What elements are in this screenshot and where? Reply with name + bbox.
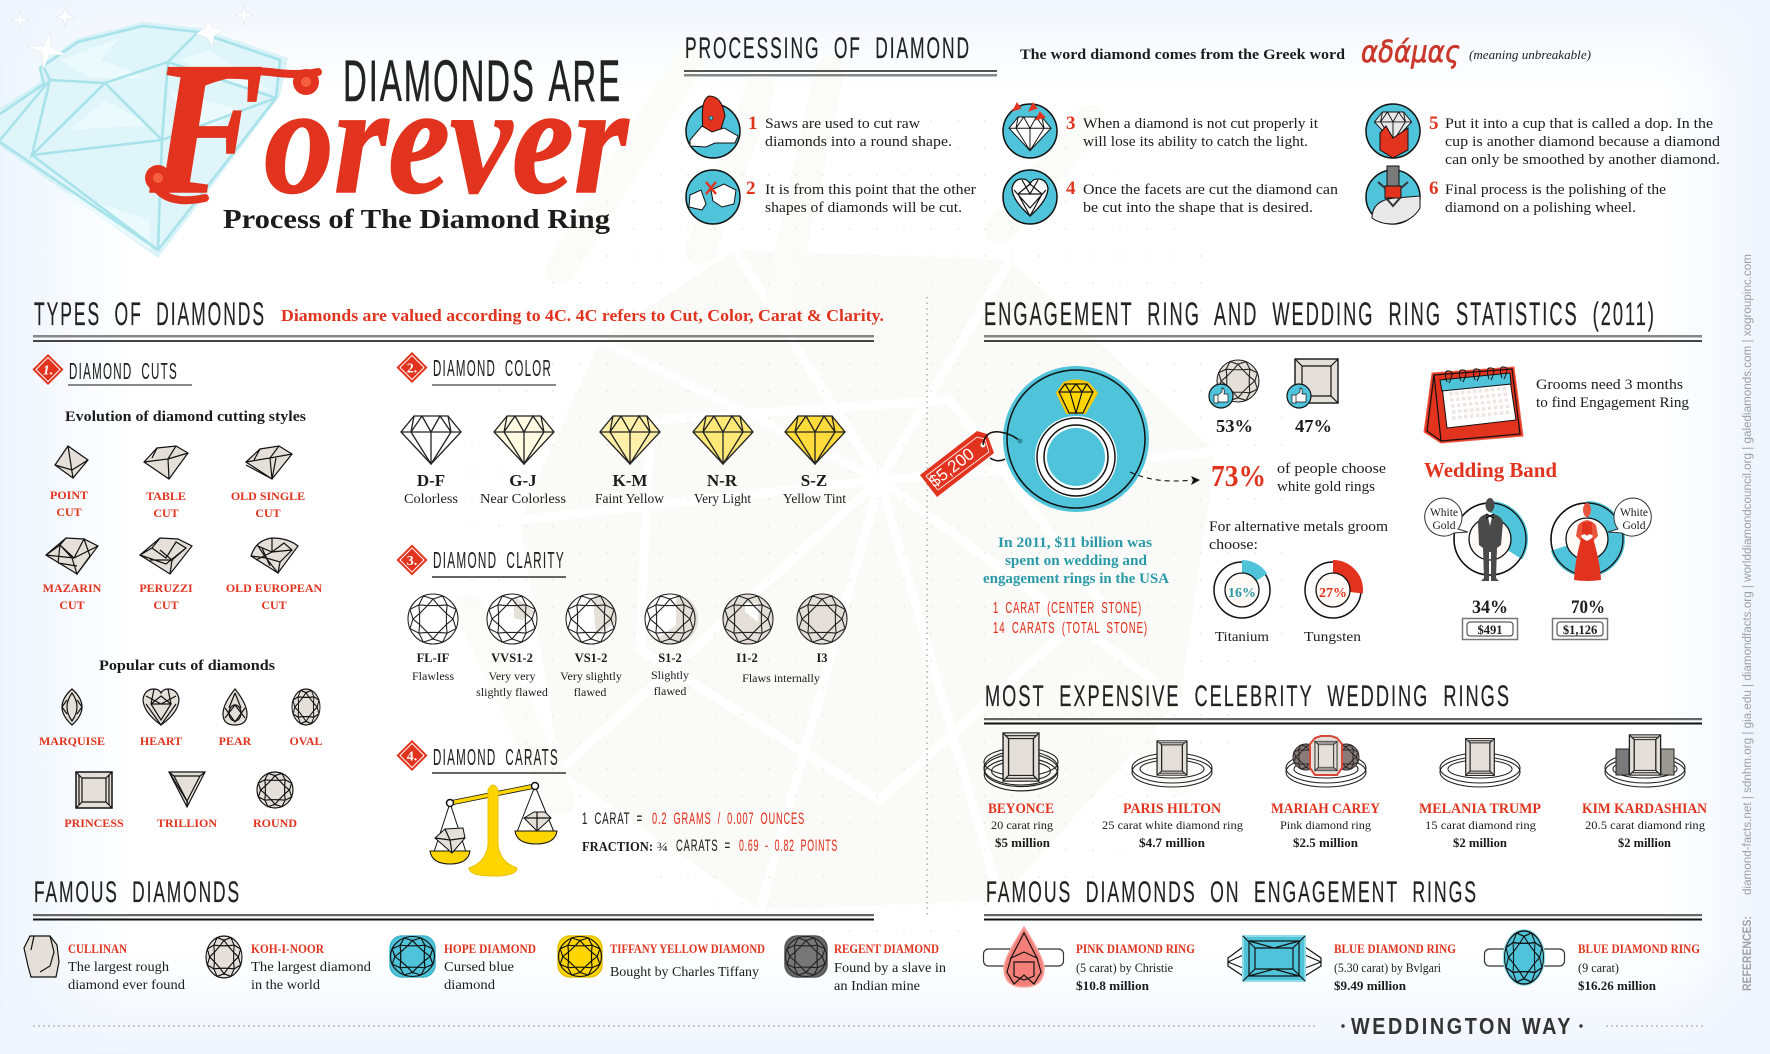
blue diamond ring Bvlgari — [1228, 936, 1456, 993]
carat conversion — [582, 809, 805, 828]
stat: 73 percent white gold: of people choose — [1277, 461, 1386, 477]
icon: princess — [76, 772, 112, 808]
alternative metals text: choose: — [1209, 537, 1258, 553]
panel: diamond cuts — [32, 354, 323, 830]
Regent Diamond: Found by a slave in — [834, 961, 946, 976]
step 4: 4 — [1066, 178, 1076, 199]
label: old single cut: OLD SINGLE — [231, 489, 305, 503]
clarity S1-2: S1-2 — [658, 651, 682, 665]
icon: round — [257, 772, 293, 808]
footer logo — [33, 1013, 1703, 1039]
stat: groom price: $491 — [1478, 623, 1502, 637]
clarity S1-2: Slightly — [651, 668, 689, 682]
references: diamond-facts.net | sdnhm.org | gia.edu | diamondfacts.org | worlddiamondcouncil.org | galediamonds.com | xogroupinc.com — [1742, 254, 1754, 895]
blue diamond ring oval: (9 carat) — [1578, 961, 1619, 975]
label: heart: HEART — [140, 734, 182, 748]
icon: ring — [1003, 366, 1149, 512]
hero diamond with stars — [0, 22, 288, 258]
donut: titanium: Titanium — [1215, 630, 1269, 645]
step 6: Final process is the polishing of the — [1445, 182, 1666, 198]
label: table cut: CUT — [153, 506, 179, 520]
badge 3: 3. — [407, 554, 417, 569]
blue diamond ring Bvlgari: BLUE DIAMOND RING — [1334, 942, 1456, 956]
dashed arrow — [1130, 472, 1200, 485]
ring: Beyonce: $5 million — [995, 836, 1050, 850]
speech bubble right: Gold — [1622, 520, 1646, 532]
color G-J — [480, 416, 566, 507]
label: old european cut: CUT — [261, 598, 287, 612]
icon: old european cut — [251, 538, 298, 573]
clarity I1-2 — [723, 594, 773, 665]
donut: titanium — [1214, 562, 1270, 645]
greek word note: αδάμας — [1361, 35, 1460, 70]
alternative metals text: For alternative metals groom — [1209, 519, 1388, 535]
stat: groom price — [1462, 597, 1518, 640]
ring: Melania Trump: $2 million — [1453, 836, 1507, 850]
color K-M: Faint Yellow — [595, 492, 665, 507]
label: mazarin cut: MAZARIN — [43, 581, 102, 595]
carat fraction: ¾ — [657, 839, 668, 854]
badge 2: 2. — [407, 362, 417, 376]
color G-J: Near Colorless — [480, 492, 566, 507]
panel: diamond color — [396, 352, 846, 507]
icon: table cut — [144, 446, 188, 479]
Koh-I-Noor: KOH-I-NOOR — [251, 942, 325, 956]
Tiffany Yellow Diamond: TIFFANY YELLOW DIAMOND — [610, 942, 765, 956]
step 4 — [1003, 170, 1339, 224]
ring: Paris Hilton: $4.7 million — [1139, 836, 1205, 850]
Koh-I-Noor: in the world — [251, 978, 320, 993]
step 1 — [686, 96, 952, 158]
color S-Z: S-Z — [801, 471, 827, 490]
icon: heart — [143, 689, 179, 725]
stat: round 53 percent: 53% — [1216, 416, 1253, 436]
clarity S1-2 — [645, 594, 698, 698]
Cullinan: CULLINAN — [68, 942, 127, 956]
heading: processing: PROCESSING OF DIAMOND — [685, 32, 971, 65]
label: point cut: CUT — [56, 505, 82, 519]
spend text: In 2011, $11 billion was — [998, 535, 1152, 551]
ring: Mariah Carey: $2.5 million — [1293, 836, 1358, 850]
ring: Beyonce: BEYONCE — [988, 801, 1054, 817]
step 2: shapes of diamonds will be cut. — [765, 200, 962, 216]
color K-M — [595, 416, 665, 507]
donut: bride — [1551, 503, 1623, 581]
label: princess: PRINCESS — [64, 816, 124, 830]
color S-Z: Yellow Tint — [783, 492, 846, 507]
step 3: When a diamond is not cut properly it — [1083, 116, 1318, 132]
panel: diamond clarity — [396, 544, 847, 699]
icon: marquise — [62, 689, 82, 725]
ring: Mariah Carey: Pink diamond ring — [1280, 818, 1371, 832]
carat fraction: FRACTION: — [582, 839, 653, 854]
clarity FL-IF: Flawless — [412, 669, 454, 683]
step 2: 2 — [746, 178, 756, 199]
blue diamond ring oval: $16.26 million — [1578, 979, 1656, 993]
stat: round 53 percent — [1209, 360, 1259, 436]
label: peruzzi cut: CUT — [153, 598, 179, 612]
grooms text: Grooms need 3 months — [1536, 377, 1683, 393]
badge 1: 1. — [43, 364, 53, 378]
heading: types of diamonds: Diamonds are valued according to 4C. 4C refers to Cut, Color, Carat & Clarity. — [281, 306, 884, 325]
Hope Diamond: diamond — [444, 978, 495, 993]
title: Diamonds Are: DIAMONDS ARE — [343, 49, 622, 114]
label: round: ROUND — [253, 816, 297, 830]
Hope Diamond: Cursed blue — [444, 960, 514, 975]
panel: engagement ring stats — [920, 359, 1689, 645]
Cullinan — [24, 936, 185, 993]
label: peruzzi cut: PERUZZI — [139, 581, 193, 595]
step 5: Put it into a cup that is called a dop. In the — [1445, 116, 1713, 132]
label: old european cut: OLD EUROPEAN — [226, 581, 323, 595]
icon: oval — [292, 689, 320, 725]
ring: Melania Trump — [1419, 739, 1541, 850]
step 6: diamond on a polishing wheel. — [1445, 200, 1636, 216]
Koh-I-Noor — [206, 936, 371, 993]
badge 4: 4. — [407, 750, 417, 764]
step 2: It is from this point that the other — [765, 182, 976, 198]
blue diamond ring oval: BLUE DIAMOND RING — [1578, 942, 1700, 956]
stat: 73 percent white gold — [1211, 458, 1386, 495]
speech bubble left: White — [1430, 507, 1458, 519]
heading: diamond carats: DIAMOND CARATS — [433, 744, 559, 770]
stat: bride price: $1,126 — [1563, 623, 1597, 637]
heading: wedding band: Wedding Band — [1424, 458, 1557, 482]
Regent Diamond: REGENT DIAMOND — [834, 942, 939, 956]
color S-Z — [783, 416, 846, 507]
ring: Paris Hilton — [1102, 741, 1243, 850]
donut: tungsten: 27% — [1319, 586, 1347, 601]
stat: princess 47 percent — [1287, 359, 1338, 436]
heading: famous diamonds: FAMOUS DIAMONDS — [34, 876, 241, 909]
label: flaws internally: Flaws internally — [742, 671, 820, 685]
icon: calendar — [1424, 367, 1523, 443]
spend text — [983, 535, 1169, 587]
footer logo: WEDDINGTON WAY — [1351, 1013, 1573, 1039]
color N-R: Very Light — [694, 492, 751, 507]
stat: princess 47 percent: 47% — [1295, 416, 1332, 436]
title: Forever: Forever — [149, 24, 630, 234]
speech bubble left: Gold — [1432, 520, 1456, 532]
ring: Beyonce: 20 carat ring — [991, 818, 1053, 832]
step 5 — [1366, 104, 1721, 168]
speech bubble right — [1608, 498, 1651, 536]
clarity FL-IF — [408, 594, 458, 683]
Tiffany Yellow Diamond — [558, 936, 765, 980]
stat: bride price: 70% — [1571, 597, 1605, 618]
step 1: diamonds into a round shape. — [765, 134, 952, 150]
Hope Diamond: HOPE DIAMOND — [444, 942, 536, 956]
references: REFERENCES: — [1742, 916, 1754, 991]
stat: 73 percent white gold: 73% — [1211, 458, 1266, 493]
ring: Mariah Carey: MARIAH CAREY — [1271, 801, 1380, 817]
ring: Kim Kardashian: $2 million — [1618, 836, 1671, 850]
label: old single cut: CUT — [255, 506, 281, 520]
blue diamond ring Bvlgari: $9.49 million — [1334, 979, 1406, 993]
clarity I3: I3 — [816, 651, 828, 665]
clarity VS1-2 — [560, 594, 622, 699]
heading: types of diamonds: TYPES OF DIAMONDS — [34, 296, 266, 332]
donut: groom — [1454, 498, 1526, 581]
step 5: 5 — [1429, 113, 1438, 134]
Hope Diamond — [390, 936, 536, 993]
divider — [926, 297, 928, 917]
carat conversion: 0.2 GRAMS / 0.007 OUNCES — [652, 809, 805, 828]
clarity I3 — [797, 594, 847, 665]
stat: groom price: 34% — [1472, 597, 1508, 618]
stat: 73 percent white gold: white gold rings — [1277, 479, 1375, 495]
grooms text — [1536, 377, 1689, 411]
icon: trillion — [169, 772, 205, 807]
color D-F: Colorless — [404, 492, 458, 507]
panel: famous engagement rings — [984, 927, 1700, 993]
step 5: can only be smoothed by another diamond. — [1445, 152, 1720, 168]
ring: Kim Kardashian — [1582, 735, 1707, 850]
step 4: Once the facets are cut the diamond can — [1083, 182, 1339, 198]
color N-R: N-R — [707, 471, 738, 490]
price tag — [920, 431, 1022, 497]
pink diamond ring: $10.8 million — [1076, 979, 1149, 993]
label: oval: OVAL — [289, 734, 323, 748]
step 3: will lose its ability to catch the light. — [1083, 134, 1308, 150]
step 3 — [1003, 104, 1318, 158]
color K-M: K-M — [613, 471, 647, 490]
panel: diamond carats — [396, 740, 838, 876]
price tag: $5,200 — [925, 444, 978, 491]
pink diamond ring: (5 carat) by Christie — [1076, 961, 1173, 975]
greek word note: The word diamond comes from the Greek word — [1020, 47, 1345, 63]
Tiffany Yellow Diamond: Bought by Charles Tiffany — [610, 965, 759, 980]
step 6 — [1366, 166, 1666, 224]
clarity VVS1-2: VVS1-2 — [491, 651, 533, 665]
color D-F — [401, 416, 461, 507]
icon: point cut — [55, 446, 88, 478]
step 4: be cut into the shape that is desired. — [1083, 200, 1313, 216]
carat text: 14 CARATS (TOTAL STONE) — [993, 620, 1148, 637]
donut: tungsten — [1304, 562, 1361, 645]
carat fraction: 0.69 - 0.82 POINTS — [739, 836, 838, 855]
speech bubble left — [1425, 498, 1468, 536]
subtitle: Process of The Diamond Ring — [223, 204, 611, 234]
icon: scale — [430, 782, 557, 876]
label: point cut: POINT — [50, 488, 88, 502]
Cullinan: diamond ever found — [68, 978, 185, 993]
Regent Diamond — [785, 936, 946, 994]
carat fraction — [582, 836, 838, 855]
spend text: engagement rings in the USA — [983, 571, 1169, 587]
step 2 — [686, 170, 976, 224]
color G-J: G-J — [509, 471, 537, 490]
badge 3 — [396, 544, 428, 576]
label: table cut: TABLE — [146, 489, 186, 503]
color D-F: D-F — [417, 471, 445, 490]
carat text: 1 CARAT (CENTER STONE) — [993, 600, 1142, 617]
carat text — [993, 600, 1148, 637]
Regent Diamond: an Indian mine — [834, 979, 920, 994]
clarity VS1-2: VS1-2 — [575, 651, 607, 665]
carat conversion: 1 CARAT = — [582, 809, 643, 828]
panel: celebrity rings — [984, 733, 1707, 850]
decorative stars — [11, 6, 254, 70]
panel: processing of diamond — [684, 32, 1721, 224]
label: mazarin cut: CUT — [59, 598, 85, 612]
label: trillion: TRILLION — [157, 816, 217, 830]
ring: Beyonce — [984, 733, 1058, 850]
blue diamond ring Bvlgari: (5.30 carat) by Bvlgari — [1334, 961, 1441, 975]
speech bubble right: White — [1620, 507, 1648, 519]
clarity VVS1-2 — [476, 594, 548, 699]
donut: tungsten: Tungsten — [1304, 630, 1361, 645]
step 5: cup is another diamond because a diamond — [1445, 134, 1721, 150]
ring: Paris Hilton: 25 carat white diamond ring — [1102, 818, 1243, 832]
badge 4 — [396, 740, 428, 771]
ring: Mariah Carey — [1271, 736, 1380, 850]
badge 2 — [396, 352, 428, 383]
panel: diamond color: DIAMOND COLOR — [433, 355, 552, 381]
icon: peruzzi cut — [140, 538, 192, 574]
carat fraction: CARATS = — [676, 836, 731, 855]
clarity S1-2: flawed — [654, 684, 686, 698]
heading: popular cuts: Popular cuts of diamonds — [99, 658, 275, 674]
spend text: spent on wedding and — [1005, 553, 1148, 569]
heading: types of diamonds — [33, 296, 884, 342]
ring: Melania Trump: MELANIA TRUMP — [1419, 801, 1541, 817]
clarity VS1-2: flawed — [574, 685, 606, 699]
color N-R — [693, 416, 753, 507]
clarity VVS1-2: slightly flawed — [476, 685, 548, 699]
pink diamond ring: PINK DIAMOND RING — [1076, 942, 1195, 956]
clarity FL-IF: FL-IF — [417, 651, 450, 665]
clarity VS1-2: Very slightly — [560, 669, 622, 683]
Cullinan: The largest rough — [68, 960, 169, 975]
blue diamond ring oval — [1484, 930, 1700, 993]
pink diamond ring — [984, 927, 1195, 993]
grooms text: to find Engagement Ring — [1536, 395, 1689, 411]
clarity I1-2: I1-2 — [736, 651, 758, 665]
donut: titanium: 16% — [1228, 586, 1256, 601]
icon: old single cut — [246, 446, 292, 479]
step 6: 6 — [1429, 178, 1438, 199]
icon: pear — [223, 689, 247, 725]
label: pear: PEAR — [219, 734, 252, 748]
alternative metals text — [1209, 519, 1388, 553]
step 1: Saws are used to cut raw — [765, 116, 921, 132]
greek word note — [1020, 35, 1591, 70]
heading: diamond clarity: DIAMOND CLARITY — [433, 547, 565, 573]
heading: diamond cuts: DIAMOND CUTS — [69, 358, 178, 384]
ring: Kim Kardashian: 20.5 carat diamond ring — [1585, 818, 1705, 832]
greek word note: (meaning unbreakable) — [1469, 47, 1591, 62]
panel: famous diamonds — [24, 936, 946, 994]
step 1: 1 — [748, 113, 758, 134]
step 3: 3 — [1066, 113, 1076, 134]
ring: Melania Trump: 15 carat diamond ring — [1425, 818, 1536, 832]
ring: Paris Hilton: PARIS HILTON — [1123, 801, 1221, 817]
ring: Kim Kardashian: KIM KARDASHIAN — [1582, 801, 1707, 817]
icon: mazarin cut — [46, 538, 98, 574]
clarity VVS1-2: Very very — [489, 669, 535, 683]
badge 1 — [32, 354, 64, 385]
stat: bride price — [1552, 597, 1608, 640]
Koh-I-Noor: The largest diamond — [251, 960, 371, 975]
heading: evolution: Evolution of diamond cutting styles — [65, 409, 306, 425]
label: marquise: MARQUISE — [39, 734, 105, 748]
